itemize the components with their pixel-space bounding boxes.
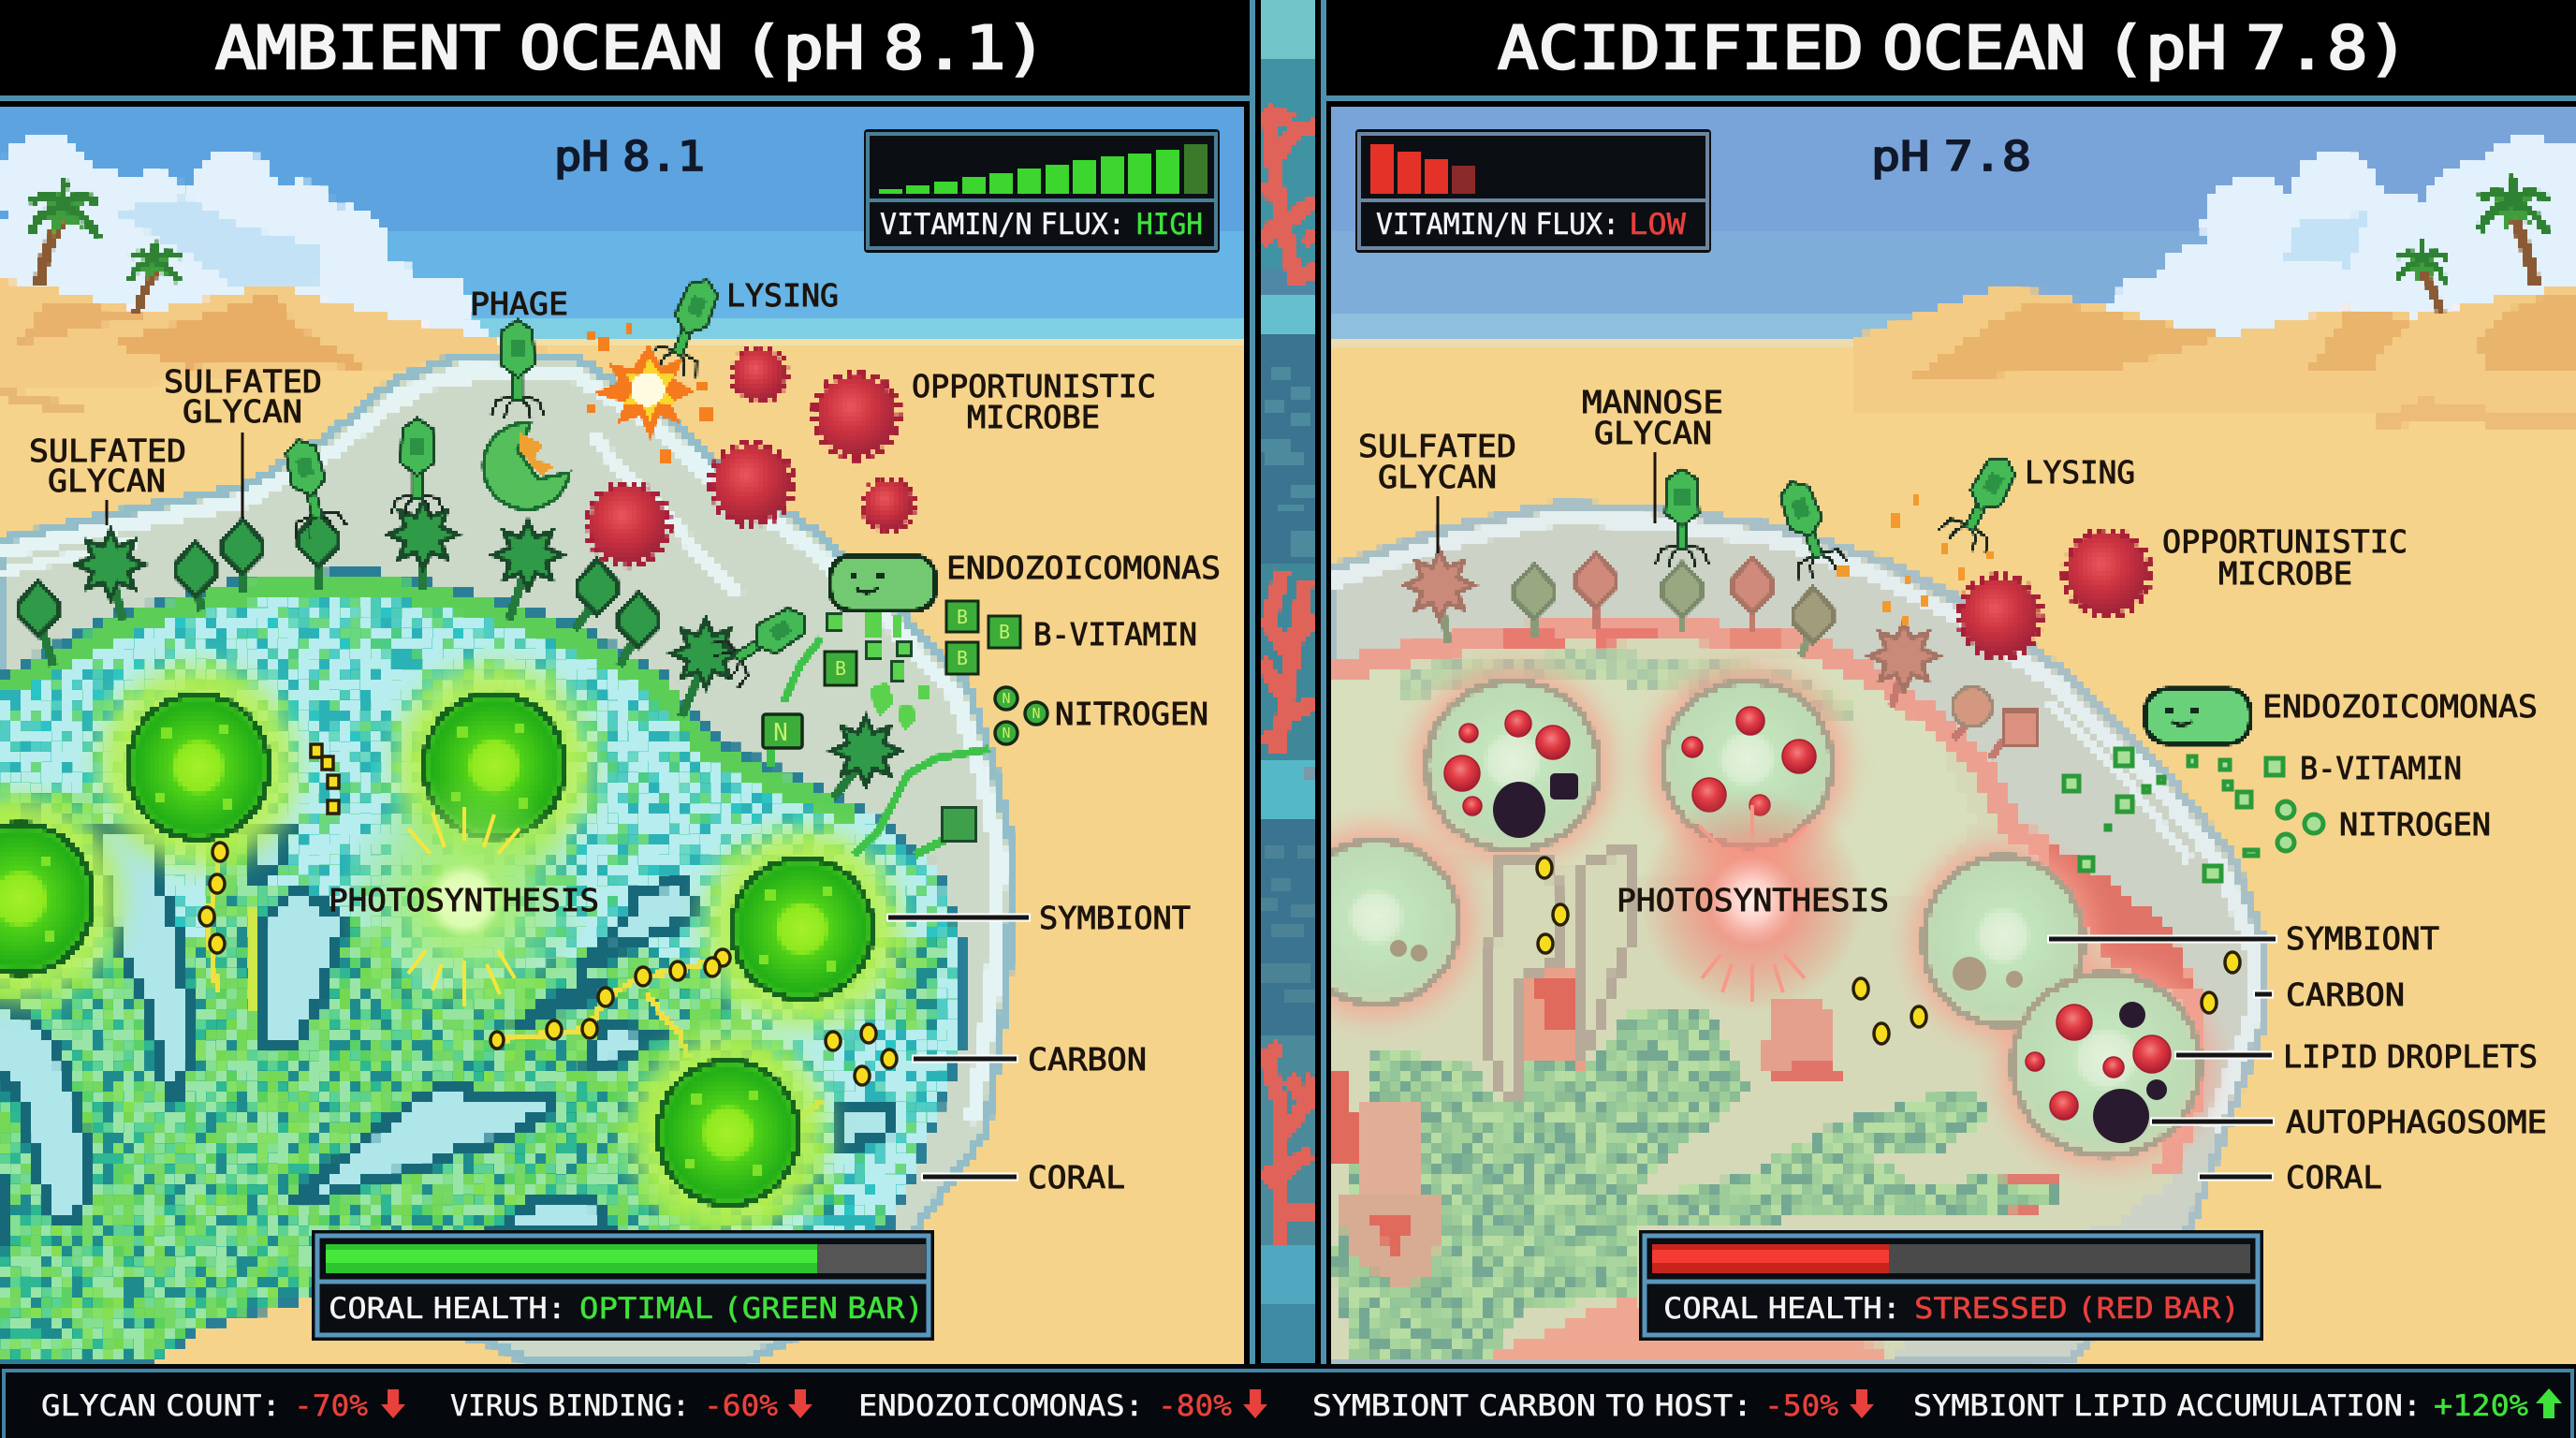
glycan: diamond [1576,553,1616,629]
label: phage: PHAGE [470,286,568,322]
health text: CORAL HEALTH: [1663,1292,1901,1326]
health text [1663,1292,2240,1326]
microbe [734,349,784,400]
phage: lysing [1938,446,2029,557]
title: ambient ocean: AMBIENT OCEAN (pH 8.1) [215,14,1046,82]
label: b-vitamin: B-VITAMIN [1033,616,1197,653]
glycan: diamond [299,512,338,590]
icons: nitrogen: N [1032,705,1041,722]
label: endozoicomonas: ENDOZOICOMONAS [946,550,1221,586]
green vines [770,638,989,855]
green coral branches [0,796,945,1364]
icons: nitrogen: N [1002,725,1011,741]
coral health meter ambient [312,1230,934,1341]
glycan: star [1406,551,1473,642]
icon: palm trees [2398,176,2549,313]
flux text high: HIGH [1136,208,1203,242]
glycan: diamond [1733,558,1772,633]
label: carbon: CARBON [1028,1041,1147,1078]
label: sulfated glycan lower: SULFATED [29,433,186,469]
coral tissue mosaic [0,574,960,1364]
phage: docked [391,418,444,517]
health bar red [1652,1244,2250,1273]
health text: OPTIMAL (GREEN BAR) [579,1292,924,1326]
scattered vitamin and nitrogen particles [2064,749,2323,881]
glycan: star [389,501,457,590]
stressed symbiont 1 [1427,682,1599,850]
green rim [0,574,862,811]
icons: b-vitamins: B [835,657,846,680]
photosynthesis glow [338,774,591,1027]
flux bars low [1370,144,1475,194]
stat: endozoicomonas: -80% [1158,1389,1232,1423]
glycan: diamond [1793,588,1833,656]
stat: virus binding: VIRUS BINDING: [450,1389,690,1423]
glycan: square [1991,711,2038,758]
glycan: square [915,807,975,855]
icons: b-vitamins: B [957,647,968,669]
stat: symbiont lipid: SYMBIONT LIPID ACCUMULATION: [1913,1389,2422,1423]
ph label acidified: pH 7.8 [1871,133,2031,181]
sky and sand background [1326,107,2576,1366]
label: mannose glycan [1582,384,1723,451]
symbiont 2 [395,665,593,867]
health text [329,1292,924,1326]
microbe [2068,534,2146,612]
ph label ambient: pH 8.1 [554,133,705,181]
label: coral: CORAL [1028,1159,1125,1196]
label: lysing: LYSING [2025,454,2135,491]
pale dome checker [1404,651,1863,721]
icons: b-vitamins: B [957,606,968,628]
symbiont 5 [629,1034,827,1232]
label: coral: CORAL [2286,1159,2382,1196]
label: opportunistic microbe [2162,523,2408,592]
stat: endozoicomonas [858,1389,1267,1423]
flux text low: LOW [1629,208,1686,242]
label: nitrogen: NITROGEN [1055,696,1208,732]
leader lines [1438,452,2277,1177]
label: carbon: CARBON [2286,976,2405,1013]
stat: endozoicomonas: ENDOZOICOMONAS: [858,1389,1144,1423]
label: opportunistic microbe: MICROBE [967,399,1100,435]
label: autophagosome: AUTOPHAGOSOME [2286,1104,2547,1140]
glycan: diamond [1662,563,1702,633]
icons: nitrogen: N [1002,690,1011,707]
icons: b-vitamins: B [999,621,1010,643]
glycan: diamond [223,520,262,592]
label: nitrogen: NITROGEN [2339,806,2491,843]
icon: endozoicomonas [2145,689,2250,743]
label: sulfated glycan lower: GLYCAN [48,462,166,499]
stat: glycan count: GLYCAN COUNT: [41,1389,281,1423]
glycan: star [77,531,144,620]
microbe [817,376,896,455]
label: symbiont: SYMBIONT [1039,900,1191,936]
title: acidified ocean: ACIDIFIED OCEAN (pH 7.8) [1498,14,2408,82]
photosynthesis glow [1640,788,1865,1013]
flux bars high [879,144,1208,194]
health bar green [326,1244,926,1273]
icon: endozoicomonas [830,556,935,610]
glycan: rounded [1953,687,1992,740]
opportunistic microbes [1963,534,2146,654]
beige channels [1488,847,1631,1095]
phage: docked [272,433,347,542]
label: opportunistic microbe: MICROBE [2218,555,2352,592]
label: opportunistic microbe: OPPORTUNISTIC [912,368,1156,404]
coral health meter acidified [1639,1230,2263,1341]
phage: labelled [491,320,544,418]
tissue checker base [0,574,960,1364]
green branches [1329,1005,2060,1360]
stat: virus binding [450,1389,812,1423]
secreted green particles [827,613,930,730]
pale channels [0,833,891,1245]
glycan: diamond [1515,565,1554,638]
icons: nitrogen: N [773,719,788,747]
glycans and phages on acidified coral [1406,446,2038,758]
clouds and dunes [0,135,580,417]
label: sulfated glycan: GLYCAN [1378,459,1497,495]
microbe [714,447,789,521]
phage: bound [1656,469,1708,567]
flux text low: VITAMIN/N FLUX: [1376,208,1619,242]
glycan: star [1870,623,1938,707]
stat: symbiont lipid: +120% [2434,1389,2528,1423]
microbe [591,487,666,562]
sky and sand background [0,107,1250,1366]
label: b-vitamin: B-VITAMIN [2300,750,2462,786]
tissue outline [0,574,960,1364]
ghost symbiont 4 [1924,857,2083,1025]
label: sulfated glycan upper: SULFATED [164,363,322,400]
yellow vertical trail [247,908,256,1011]
glycan: diamond [176,542,215,610]
labels: ambient [29,277,1221,1196]
lysis sparks [1837,494,1994,625]
broken phage shell [484,423,569,509]
glycan: diamond [19,581,58,666]
panel: ambient ocean scene [0,107,1250,1366]
label: sulfated glycan lower [29,433,186,499]
icons: b-vitamins [825,601,1020,685]
label: sulfated glycan [1358,428,1516,495]
label: endozoicomonas: ENDOZOICOMONAS [2262,688,2538,725]
microbe [1963,580,2038,654]
label: photosynthesis: PHOTOSYNTHESIS [1617,882,1889,918]
pink stress glow [1279,667,2213,1167]
reef corals [1261,110,1315,1245]
stat: glycan count: -70% [294,1389,368,1423]
labels: acidified [1358,384,2547,1196]
stressed symbiont 5 [2012,974,2200,1155]
icons: nitrogen [763,687,1047,748]
label: sulfated glycan upper [164,363,322,430]
label: sulfated glycan upper: GLYCAN [183,393,302,430]
symbiont 4 [703,829,901,1028]
flux meter acidified [1355,129,1711,253]
carbon dots [1537,858,2240,1044]
stat: glycan count [41,1389,405,1423]
opportunistic microbes [591,349,913,562]
health text: STRESSED (RED BAR) [1914,1292,2240,1326]
label: symbiont: SYMBIONT [2286,920,2439,957]
clouds and dunes [1854,136,2576,435]
health text: CORAL HEALTH: [329,1292,566,1326]
icon: lysis explosion [588,323,713,464]
symbiont 1 [99,666,298,868]
flux meter ambient [864,129,1220,253]
yellow carbon trails [207,843,821,1118]
microbe [864,480,913,529]
leader lines [107,433,1031,1177]
label: photosynthesis: PHOTOSYNTHESIS [329,882,599,918]
tissue base [1310,615,2207,1364]
stressed coral tissue [1279,615,2213,1364]
salmon patches over branches [1329,1067,1443,1284]
stat: virus binding: -60% [704,1389,778,1423]
glycan: star [672,620,739,716]
symbiont 3 [0,796,122,1002]
stat: symbiont carbon: SYMBIONT CARBON TO HOST: [1312,1389,1752,1423]
strip colour bands [1261,0,1315,1365]
label: opportunistic microbe: OPPORTUNISTIC [2162,523,2408,560]
mucus layer [1329,505,2265,1364]
glycan: star [494,521,562,620]
glycan: star [832,717,900,798]
salmon rim and red patches [1329,615,2207,1364]
glycan: diamond [575,560,617,629]
phage: lysing [646,271,732,381]
mucus layer [0,356,1014,1364]
stressed symbiont 2 [1663,682,1832,846]
carbon dots [199,744,897,1085]
panel: acidified ocean scene [1279,107,2576,1366]
label: lipid droplets: LIPID DROPLETS [2283,1038,2538,1075]
phage: bound [1766,473,1850,583]
icon: palm trees [30,180,181,313]
glycans and phages on ambient coral [19,271,989,855]
label: lysing: LYSING [726,277,839,314]
label: mannose glycan: GLYCAN [1594,415,1712,451]
label: sulfated glycan: SULFATED [1358,428,1516,464]
ghost symbiont 3 [1294,841,1458,1004]
glycan: diamond [619,593,658,666]
phage: docked [707,594,818,690]
bottom statistics bar [0,1364,2576,1438]
stat: symbiont carbon: -50% [1764,1389,1838,1423]
label: opportunistic microbe [912,368,1156,435]
label: mannose glycan: MANNOSE [1582,384,1723,420]
flux text high: VITAMIN/N FLUX: [880,208,1125,242]
